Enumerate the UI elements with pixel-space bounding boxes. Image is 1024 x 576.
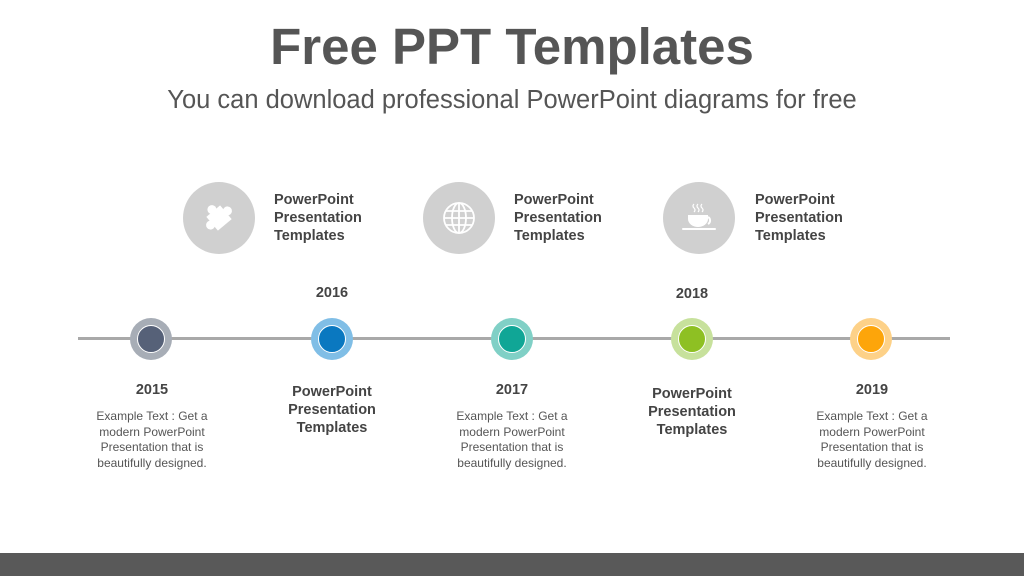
text 2019: Example Text : Get a modern PowerPoint Presentation that is beautifully designed.	[816, 409, 928, 470]
text: item 1: PowerPoint	[274, 192, 354, 208]
icon: coffee cup	[663, 182, 735, 254]
subtitle: You can download professional PowerPoint diagrams for free	[167, 86, 857, 114]
text: item 1: Templates	[274, 228, 345, 244]
marker 2016	[311, 318, 353, 360]
text below 2018: Templates	[657, 422, 727, 438]
block 2017	[456, 382, 568, 470]
text: item 3: Presentation	[755, 210, 843, 226]
text below 2016: Templates	[297, 420, 367, 436]
marker 2017	[491, 318, 533, 360]
year 2017: 2017	[496, 382, 528, 398]
text: item 2	[514, 192, 602, 244]
year 2019: 2019	[856, 382, 888, 398]
marker 2018	[671, 318, 713, 360]
text 2015: Example Text : Get a modern PowerPoint Presentation that is beautifully designed.	[96, 409, 208, 470]
text below 2018: PowerPoint	[652, 386, 732, 402]
year 2015: 2015	[136, 382, 168, 398]
text: item 1: Presentation	[274, 210, 362, 226]
text below 2018: Presentation	[648, 404, 736, 420]
label 2016: 2016	[316, 285, 348, 301]
label 2018: 2018	[676, 286, 708, 302]
text below 2016: Presentation	[288, 402, 376, 418]
text: item 2: Templates	[514, 228, 585, 244]
text: item 3: PowerPoint	[755, 192, 835, 208]
text: item 3	[755, 192, 843, 244]
block 2019	[816, 382, 928, 470]
text: item 1	[274, 192, 362, 244]
title: Free PPT Templates	[270, 18, 754, 75]
text: item 2: PowerPoint	[514, 192, 594, 208]
marker 2019	[850, 318, 892, 360]
text: item 2: Presentation	[514, 210, 602, 226]
timeline line	[78, 337, 950, 340]
text: item 3: Templates	[755, 228, 826, 244]
text below 2016	[288, 384, 376, 436]
icon: puzzle	[183, 182, 255, 254]
text below 2016: PowerPoint	[292, 384, 372, 400]
icon: globe	[423, 182, 495, 254]
text 2017: Example Text : Get a modern PowerPoint Presentation that is beautifully designed.	[456, 409, 568, 470]
footer bar	[0, 553, 1024, 576]
block 2015	[96, 382, 208, 470]
marker 2015	[130, 318, 172, 360]
text below 2018	[648, 386, 736, 438]
